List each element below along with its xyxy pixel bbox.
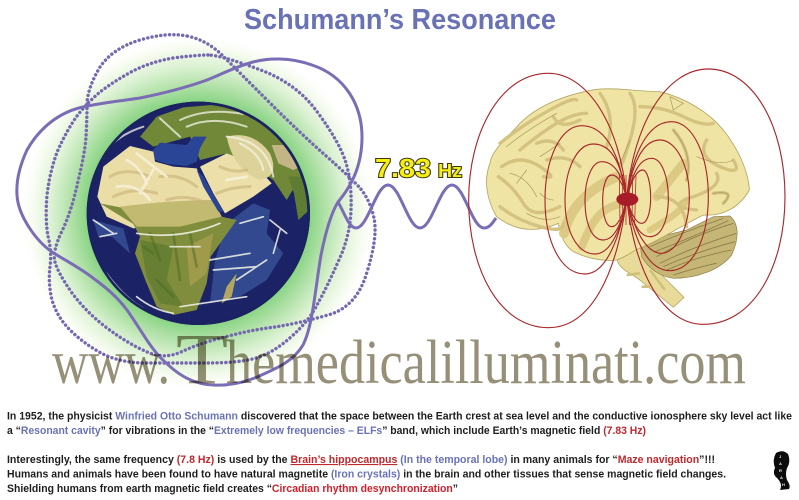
cerebellum xyxy=(640,216,737,278)
frequency label xyxy=(375,153,462,183)
mediterranean sea xyxy=(153,137,207,166)
clouds xyxy=(93,112,287,313)
india xyxy=(288,177,309,220)
brain stem xyxy=(617,247,684,307)
icon: signature silhouette xyxy=(774,451,790,490)
watermark url xyxy=(52,319,746,399)
line 4: Humans and animals have been found to have natural magnetite (Iron crystals) in the brain and other tissues that sense magnetic field changes. xyxy=(7,468,726,480)
icon: signature silhouette: A xyxy=(779,461,782,466)
line 2: a “Resonant cavity” for vibrations in the “Extremely low frequencies – ELFs” band, which include Earth’s magnetic field (7.83 Hz) xyxy=(7,425,646,437)
central coil xyxy=(616,193,638,206)
desert texture xyxy=(110,153,250,297)
watermark url: T xyxy=(176,319,228,399)
northern land xyxy=(140,104,311,200)
icon: signature silhouette: A xyxy=(780,475,783,480)
watermark url: www. xyxy=(52,329,170,397)
sahara desert xyxy=(97,146,222,228)
indian ocean patches xyxy=(210,203,283,303)
magnetic field lines xyxy=(469,69,785,328)
icon: brain xyxy=(469,69,785,328)
madagascar xyxy=(222,273,237,303)
red sea xyxy=(197,170,223,212)
icon: signature silhouette: R xyxy=(779,468,782,473)
frequency label: 7.83 xyxy=(375,153,431,183)
green glow xyxy=(23,38,373,388)
persia swirl xyxy=(227,135,273,180)
temporal lobe bands xyxy=(564,163,687,247)
cerebrum xyxy=(487,89,749,260)
purple solid resonance wave xyxy=(17,59,496,385)
icon: earth globe xyxy=(87,102,311,325)
line 1: In 1952, the physicist Winfried Otto Schumann discovered that the space between the Earth crest at sea level and the conductive ionosphere sky level act like xyxy=(7,410,792,422)
arabia xyxy=(200,153,272,213)
line 3: Interestingly, the same frequency (7.8 Hz) is used by the Brain’s hippocampus (In the temporal lobe) in many animals for “Maze navigation”!!! xyxy=(7,454,715,466)
line 5: Shielding humans from earth magnetic field creates “Circadian rhythm desynchronization” xyxy=(7,483,458,495)
icon: signature silhouette: H xyxy=(782,482,785,487)
africa green patches xyxy=(140,240,183,307)
icon: signature silhouette: J xyxy=(779,454,781,459)
frequency label: Hz xyxy=(438,161,462,181)
body text xyxy=(7,410,792,495)
central and southern africa xyxy=(100,200,237,315)
purple dotted wave ring 1 xyxy=(54,35,375,356)
brain folds xyxy=(498,93,736,229)
purple dotted wave ring 2 xyxy=(46,55,351,363)
title: Schumann’s Resonance xyxy=(244,4,556,36)
himalaya xyxy=(272,145,298,170)
